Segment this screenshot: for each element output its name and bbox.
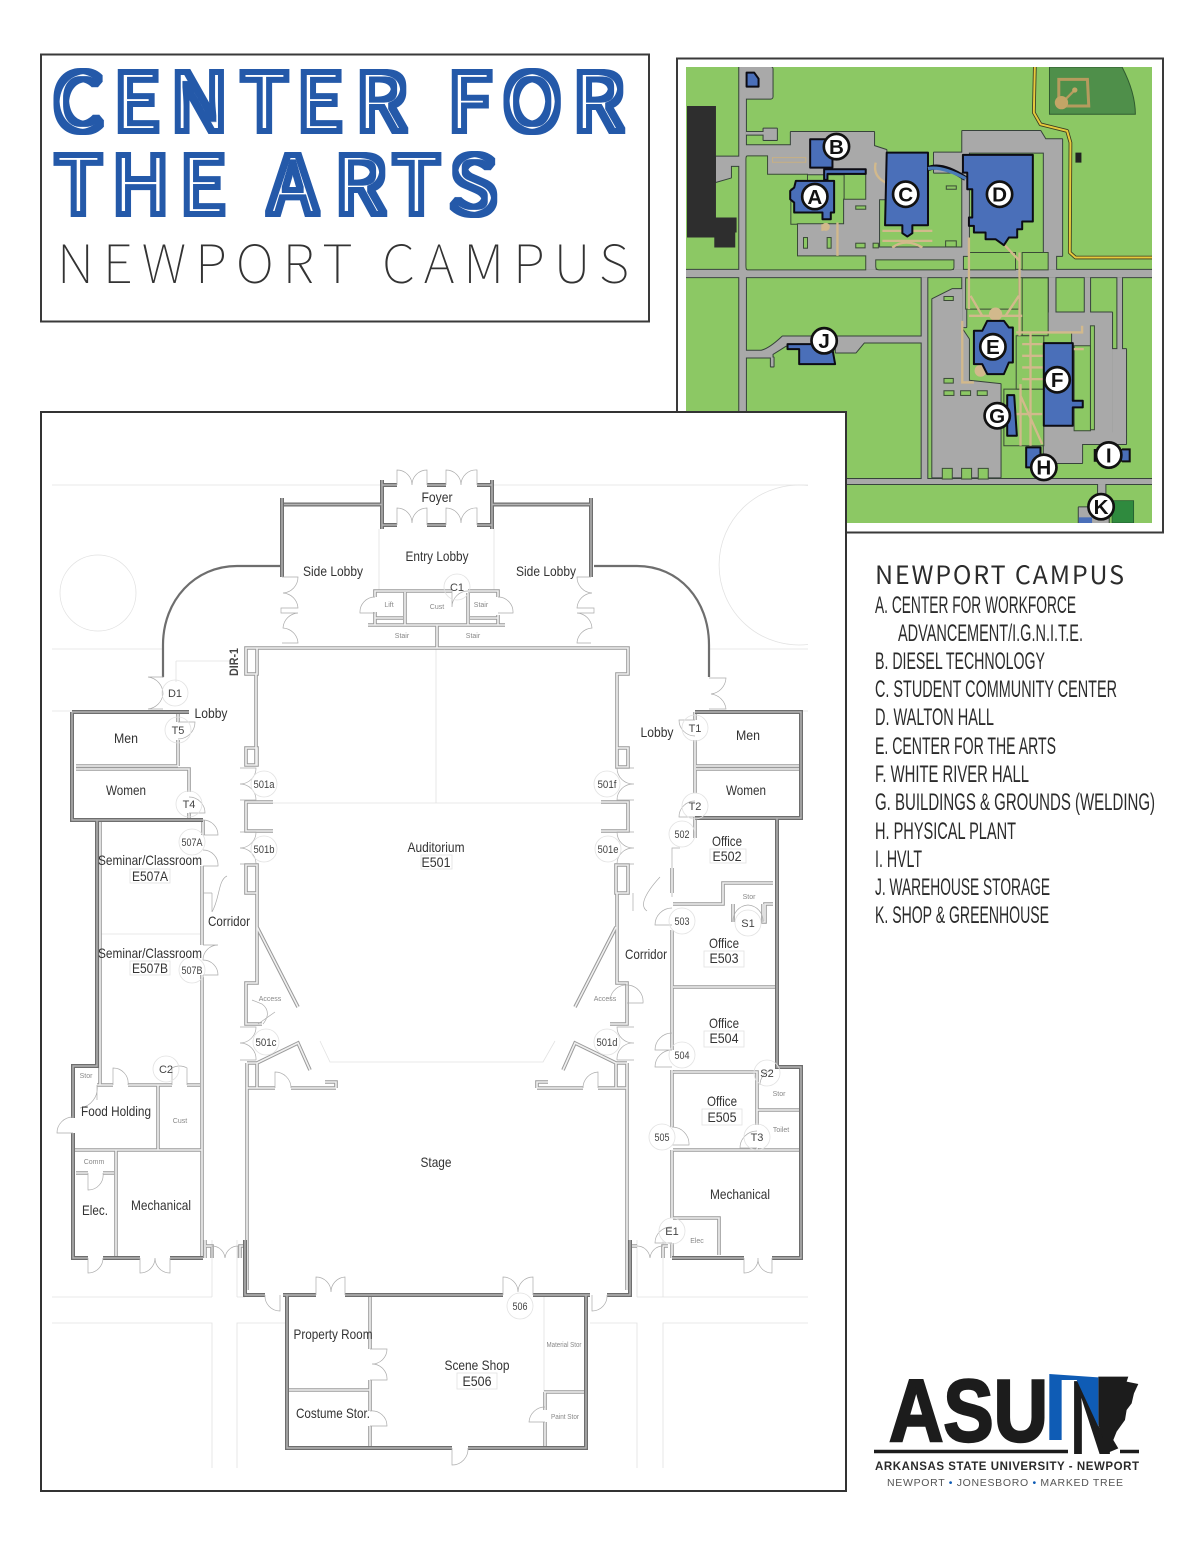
- campus roads and parking: [676, 67, 1155, 524]
- room labels: Elec.: [82, 1202, 108, 1218]
- room labels: Seminar/Classroom: [98, 852, 202, 868]
- subtitle: newport campus: NEWPORT CAMPUS: [57, 223, 629, 299]
- small room labels: Comm: [84, 1159, 104, 1166]
- exterior walls: [72, 480, 801, 1448]
- room labels: Side Lobby: [516, 563, 576, 579]
- small room labels: Toilet: [773, 1127, 789, 1134]
- legend entries: I. HVLT: [875, 846, 922, 873]
- baseball field: [1049, 67, 1135, 114]
- room labels: E507B: [132, 960, 168, 976]
- room labels: [81, 489, 770, 1421]
- door tag labels: S1: [741, 918, 755, 930]
- map marker F: F: [1051, 369, 1063, 392]
- door tag labels: 505: [654, 1132, 670, 1144]
- map marker C: C: [898, 184, 913, 207]
- logo line: university name: ARKANSAS STATE UNIVERSITY - NEWPORT: [875, 1461, 1139, 1473]
- room labels: E502: [712, 848, 742, 864]
- door tag labels: 501f: [598, 779, 617, 791]
- black neighbouring buildings: [687, 106, 737, 248]
- map marker E: [980, 334, 1006, 359]
- room labels: Office: [707, 1093, 737, 1109]
- legend entries: D. WALTON HALL: [875, 704, 994, 731]
- door tag labels: 502: [674, 829, 690, 841]
- map marker E: E: [986, 336, 1000, 359]
- map marker K: K: [1094, 496, 1109, 519]
- door tag labels: 501e: [598, 844, 618, 856]
- door tag labels: 507B: [182, 965, 202, 977]
- room labels: Office: [709, 935, 739, 951]
- room labels: E506: [462, 1373, 492, 1389]
- door tag labels: 503: [674, 916, 690, 928]
- legend entries: F. WHITE RIVER HALL: [875, 761, 1029, 788]
- small room labels: Stor: [743, 894, 756, 901]
- door tag labels: 506: [512, 1301, 528, 1313]
- door tag labels: 501b: [254, 844, 274, 856]
- door tag labels: D1: [168, 688, 182, 700]
- interior walls: [73, 591, 801, 1447]
- parking islands: [746, 156, 1094, 479]
- small room labels: Stor: [773, 1091, 786, 1098]
- door tag labels: 504: [674, 1050, 690, 1062]
- room labels: Women: [106, 782, 146, 798]
- yellow service road: [1034, 67, 1152, 258]
- small room labels: Cust: [173, 1118, 187, 1125]
- map marker I: [1096, 442, 1121, 468]
- legend: newport campus building list: [875, 556, 1155, 929]
- room labels: E504: [710, 1030, 739, 1046]
- room labels: Scene Shop: [444, 1357, 510, 1373]
- room labels: E503: [710, 950, 739, 966]
- door tag labels: C1: [450, 582, 464, 594]
- room labels: Office: [709, 1015, 739, 1031]
- plan reference label: DIR-1: [227, 648, 241, 676]
- room labels: Women: [726, 782, 766, 798]
- map marker B: [824, 134, 849, 159]
- map marker H: H: [1036, 457, 1051, 480]
- small room labels: Elec: [690, 1238, 704, 1245]
- map marker K: [1088, 494, 1114, 519]
- title: the arts: THE ARTS: [54, 122, 498, 238]
- logo mark: state silhouette: [1098, 1377, 1138, 1454]
- room labels: E505: [708, 1109, 737, 1125]
- room labels: Property Room: [294, 1326, 372, 1342]
- small room labels: Access: [259, 996, 282, 1003]
- small room labels: Stair: [466, 633, 481, 640]
- room labels: Food Holding: [81, 1103, 151, 1119]
- logo mark: blue panel: [1049, 1374, 1098, 1440]
- legend entries: ADVANCEMENT/I.G.N.I.T.E.: [898, 620, 1083, 647]
- panel: floor plan: [41, 412, 846, 1491]
- map marker J: J: [818, 330, 830, 353]
- small room labels: Stair: [474, 602, 489, 609]
- door tag labels: T3: [751, 1132, 763, 1144]
- legend entries: B. DIESEL TECHNOLOGY: [875, 648, 1045, 675]
- small room labels: Access: [594, 996, 617, 1003]
- room labels: Foyer: [422, 489, 453, 505]
- small room labels: Lift: [384, 602, 394, 609]
- site lines: [52, 485, 808, 1468]
- room labels: Costume Stor.: [296, 1405, 370, 1421]
- small room labels: Cust: [430, 604, 444, 611]
- map marker B: B: [829, 136, 844, 159]
- title: center for: CENTER FOR: [52, 39, 624, 155]
- room labels: Mechanical: [710, 1186, 770, 1202]
- room labels: Men: [114, 730, 138, 746]
- small room labels: Stor: [80, 1073, 93, 1080]
- door tag labels: T4: [183, 799, 195, 811]
- small room labels: [80, 602, 789, 1421]
- logo rule: [874, 1450, 1139, 1453]
- map marker C: [893, 182, 918, 207]
- logo line: campuses: NEWPORT • JONESBORO • MARKED TREE: [887, 1477, 1123, 1489]
- map marker J: [811, 328, 837, 353]
- small room labels: Material Stor: [546, 1342, 582, 1349]
- map marker G: [985, 403, 1010, 428]
- small room labels: Paint Stor: [551, 1414, 580, 1421]
- legend heading: NEWPORT CAMPUS: [875, 556, 1124, 592]
- legend entries: H. PHYSICAL PLANT: [875, 818, 1016, 845]
- title panel: [41, 39, 649, 322]
- door tag labels: E1: [665, 1226, 679, 1238]
- door tag labels: [159, 582, 774, 1313]
- map marker G: G: [989, 405, 1005, 428]
- map marker I: I: [1106, 444, 1112, 467]
- logo: ASUN: [874, 1359, 1139, 1489]
- room labels: Auditorium: [408, 839, 464, 855]
- walkways: [822, 163, 1084, 446]
- map marker A: [802, 184, 827, 209]
- room labels: Seminar/Classroom: [98, 945, 202, 961]
- map marker H: [1031, 455, 1056, 480]
- door tag labels: S2: [760, 1068, 774, 1080]
- door tag labels: C2: [159, 1064, 173, 1076]
- map marker D: [987, 182, 1012, 207]
- door tag labels: 501c: [256, 1037, 277, 1049]
- room labels: Men: [736, 727, 760, 743]
- legend entries: E. CENTER FOR THE ARTS: [875, 733, 1056, 760]
- room labels: Corridor: [625, 946, 667, 962]
- map marker D: D: [992, 184, 1007, 207]
- legend entries: J. WAREHOUSE STORAGE: [875, 874, 1050, 901]
- room labels: Mechanical: [131, 1197, 191, 1213]
- panel: campus map: [676, 58, 1163, 532]
- room labels: Corridor: [208, 913, 250, 929]
- doors: [57, 470, 773, 1465]
- small room labels: Stair: [395, 633, 410, 640]
- map marker F: [1044, 367, 1070, 392]
- room labels: Office: [712, 833, 742, 849]
- door tag labels: T2: [689, 801, 701, 813]
- logo wordmark ASU: ASU: [889, 1361, 1048, 1460]
- room labels: Side Lobby: [303, 563, 363, 579]
- door tag labels: 501d: [596, 1037, 618, 1049]
- legend entries: K. SHOP & GREENHOUSE: [875, 902, 1049, 929]
- door tag circles: [130, 574, 780, 1389]
- logo wordmark N: N: [1070, 1359, 1114, 1477]
- door tag labels: 501a: [254, 779, 275, 791]
- room labels: Entry Lobby: [406, 548, 468, 564]
- room labels: E501: [422, 854, 451, 870]
- room labels: Stage: [420, 1154, 452, 1170]
- buildings: [747, 73, 1134, 523]
- map marker A: A: [807, 186, 822, 209]
- room labels: Lobby: [640, 724, 674, 740]
- legend entries: [875, 592, 1155, 929]
- room labels: E507A: [132, 868, 169, 884]
- door tag labels: T5: [172, 725, 184, 737]
- door tag labels: 507A: [182, 837, 203, 849]
- door tag labels: T1: [689, 723, 701, 735]
- room labels: Lobby: [194, 705, 228, 721]
